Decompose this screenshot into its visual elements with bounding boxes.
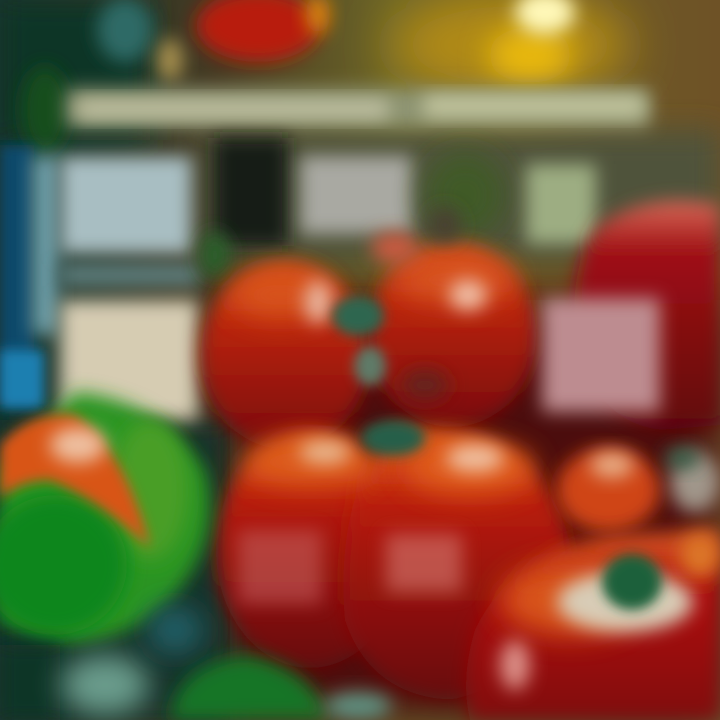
top tomato — [196, 0, 320, 62]
left teal column — [0, 145, 34, 405]
left tomato — [0, 414, 150, 548]
panel: lower left — [60, 300, 198, 420]
title text blur: right — [424, 96, 644, 116]
tomato: center left — [201, 261, 369, 449]
panel: upper right — [526, 164, 596, 244]
left leaf — [0, 392, 210, 642]
teal accent — [0, 350, 44, 408]
background: middle band — [200, 130, 720, 260]
background: lower dark red — [230, 300, 720, 720]
tomato stem: center — [332, 296, 449, 401]
stem blur — [425, 153, 505, 237]
tomato: center right — [368, 207, 536, 427]
panel: middle right — [542, 298, 660, 412]
top tomato highlight — [306, 0, 330, 34]
tomato: bottom right — [466, 530, 720, 720]
bottom pale patch — [324, 692, 392, 720]
divider strip — [60, 264, 200, 286]
green accent — [199, 231, 231, 279]
tomato: top right — [574, 200, 720, 430]
background: lower left dark — [0, 420, 230, 720]
pale strip beside column — [32, 155, 58, 335]
panel: upper left — [60, 156, 192, 254]
sun glow — [390, 0, 630, 100]
tomato: bottom center — [216, 420, 573, 700]
title band — [66, 88, 650, 128]
panel: upper middle — [300, 156, 412, 234]
title text blur: left — [78, 100, 388, 118]
bottom leaf — [170, 655, 330, 720]
tomato: right middle — [556, 447, 720, 532]
bottom left foliage — [0, 606, 203, 720]
top left foliage — [0, 0, 183, 154]
dark block — [214, 138, 288, 246]
